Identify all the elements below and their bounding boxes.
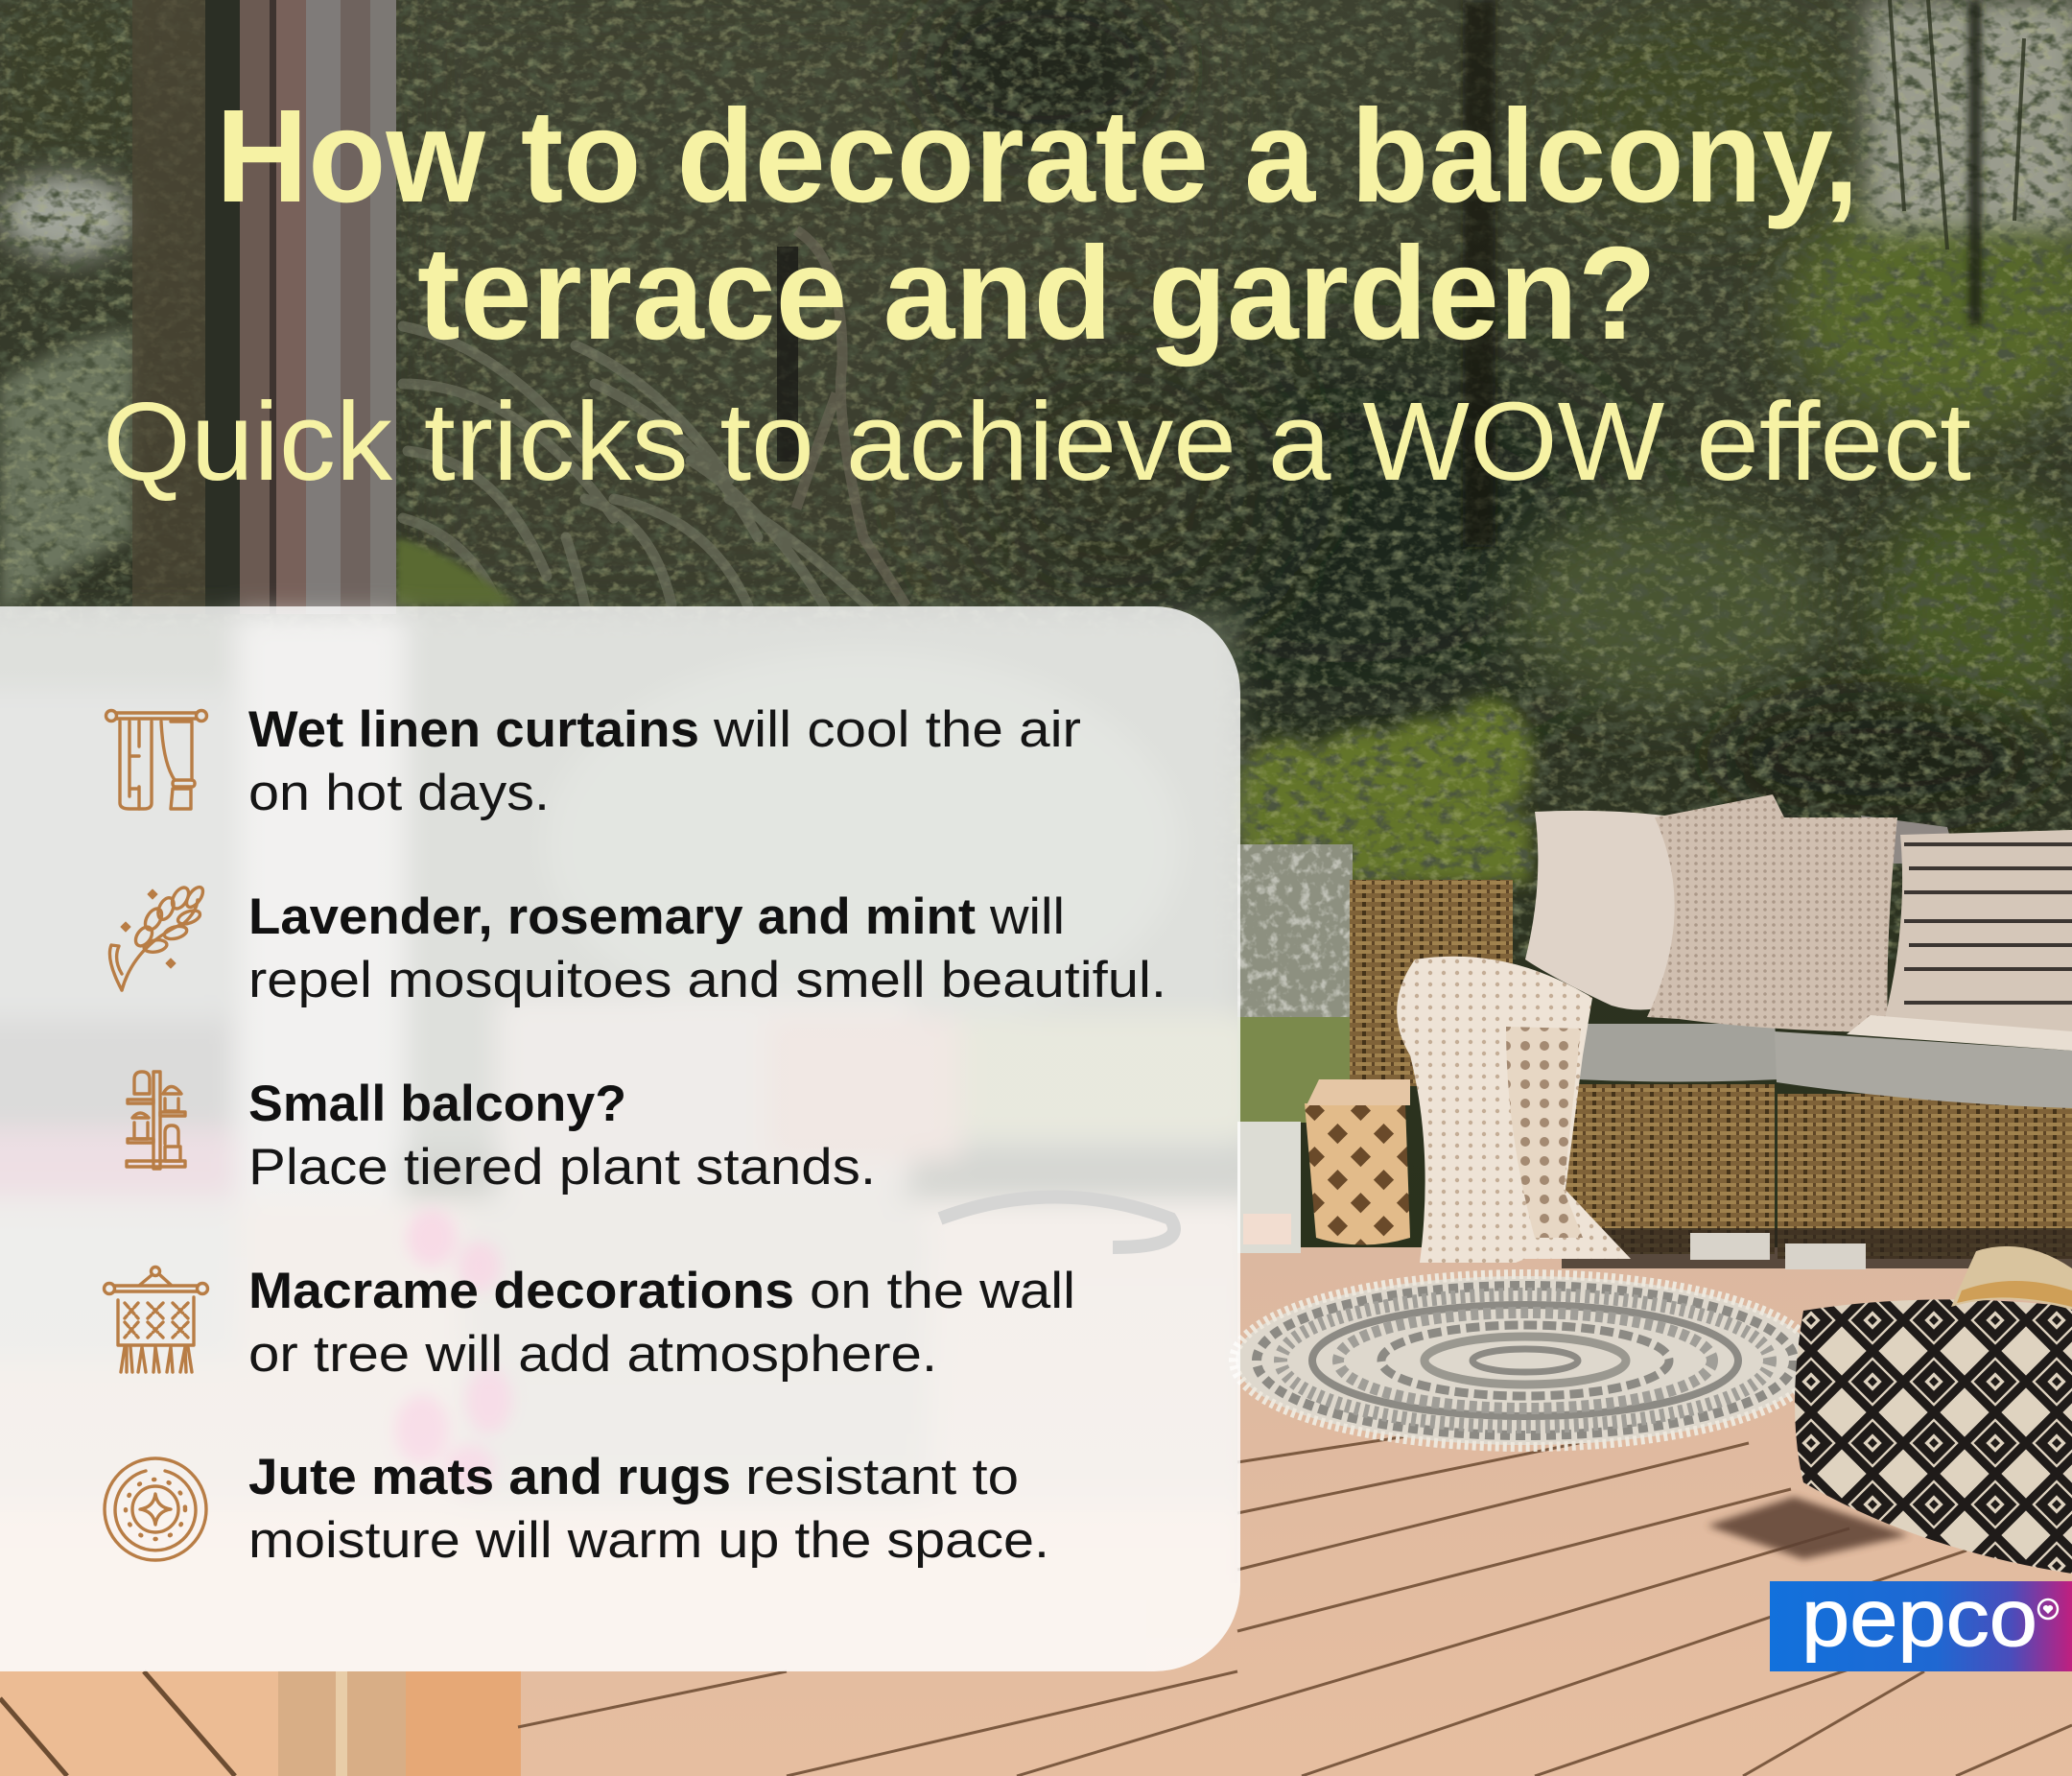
icon: round jute rug [105,1458,206,1560]
sofa [1350,880,1513,1086]
tip: wet linen curtains: will cool the air [713,701,1081,758]
window frame back [132,0,205,614]
tip: macrame decorations: Macrame decorations [248,1263,794,1319]
palm fronds [403,326,868,606]
bottom strip left [0,1671,278,1776]
icon: macrame wall hanging [104,1267,207,1372]
tip: jute mats and rugs [105,1449,1049,1569]
trunks and branches [1463,0,1495,547]
under-panel scene [0,614,1257,1737]
logo: pepco: pepco [1801,1573,2037,1663]
logo: pepco [1770,1573,2072,1671]
pouf [1795,1299,2072,1574]
title: terrace and garden? [417,220,1657,367]
throw blanket [1397,957,1631,1263]
subtitle: Quick tricks to achieve a WOW effect [103,379,1971,504]
light / dark masses of foliage [412,0,1228,614]
basket [1305,1103,1410,1245]
tip: macrame decorations [104,1263,1075,1383]
pillar stripes [240,0,270,614]
panel: translucent tips card [0,606,1240,1671]
title: How to decorate a balcony, [216,83,1859,230]
rug [1234,1274,1817,1447]
tip: lavender, rosemary and mint: repel mosquitoes and smell beautiful. [248,952,1166,1008]
tip: small balcony [127,1072,876,1196]
icon: herb sprig [109,885,206,990]
vase and flowering bush [1237,844,1353,1017]
flowers behind panel [395,1209,512,1491]
book [1951,1246,2072,1310]
tip: macrame decorations: on the wall [810,1263,1075,1319]
deck [521,1247,2072,1776]
icon: curtain [106,710,207,809]
tip: lavender, rosemary and mint: will [989,888,1065,945]
tip: jute mats and rugs: Jute mats and rugs [248,1449,731,1505]
tip: lavender, rosemary and mint [109,885,1166,1008]
icon: tiered plant stand [127,1072,185,1169]
tip: jute mats and rugs: moisture will warm up the space. [248,1512,1049,1569]
tip: small balcony: Place tiered plant stands. [248,1139,876,1196]
tip: wet linen curtains: Wet linen curtains [248,701,699,758]
tip: wet linen curtains: on hot days. [248,765,550,821]
title [216,83,1859,367]
tip: small balcony: Small balcony? [248,1076,626,1132]
tip: jute mats and rugs: resistant to [745,1449,1019,1505]
tip: macrame decorations: or tree will add atmosphere. [248,1326,937,1383]
tip: wet linen curtains [106,701,1081,821]
tip: lavender, rosemary and mint: Lavender, rosemary and mint [248,888,976,945]
